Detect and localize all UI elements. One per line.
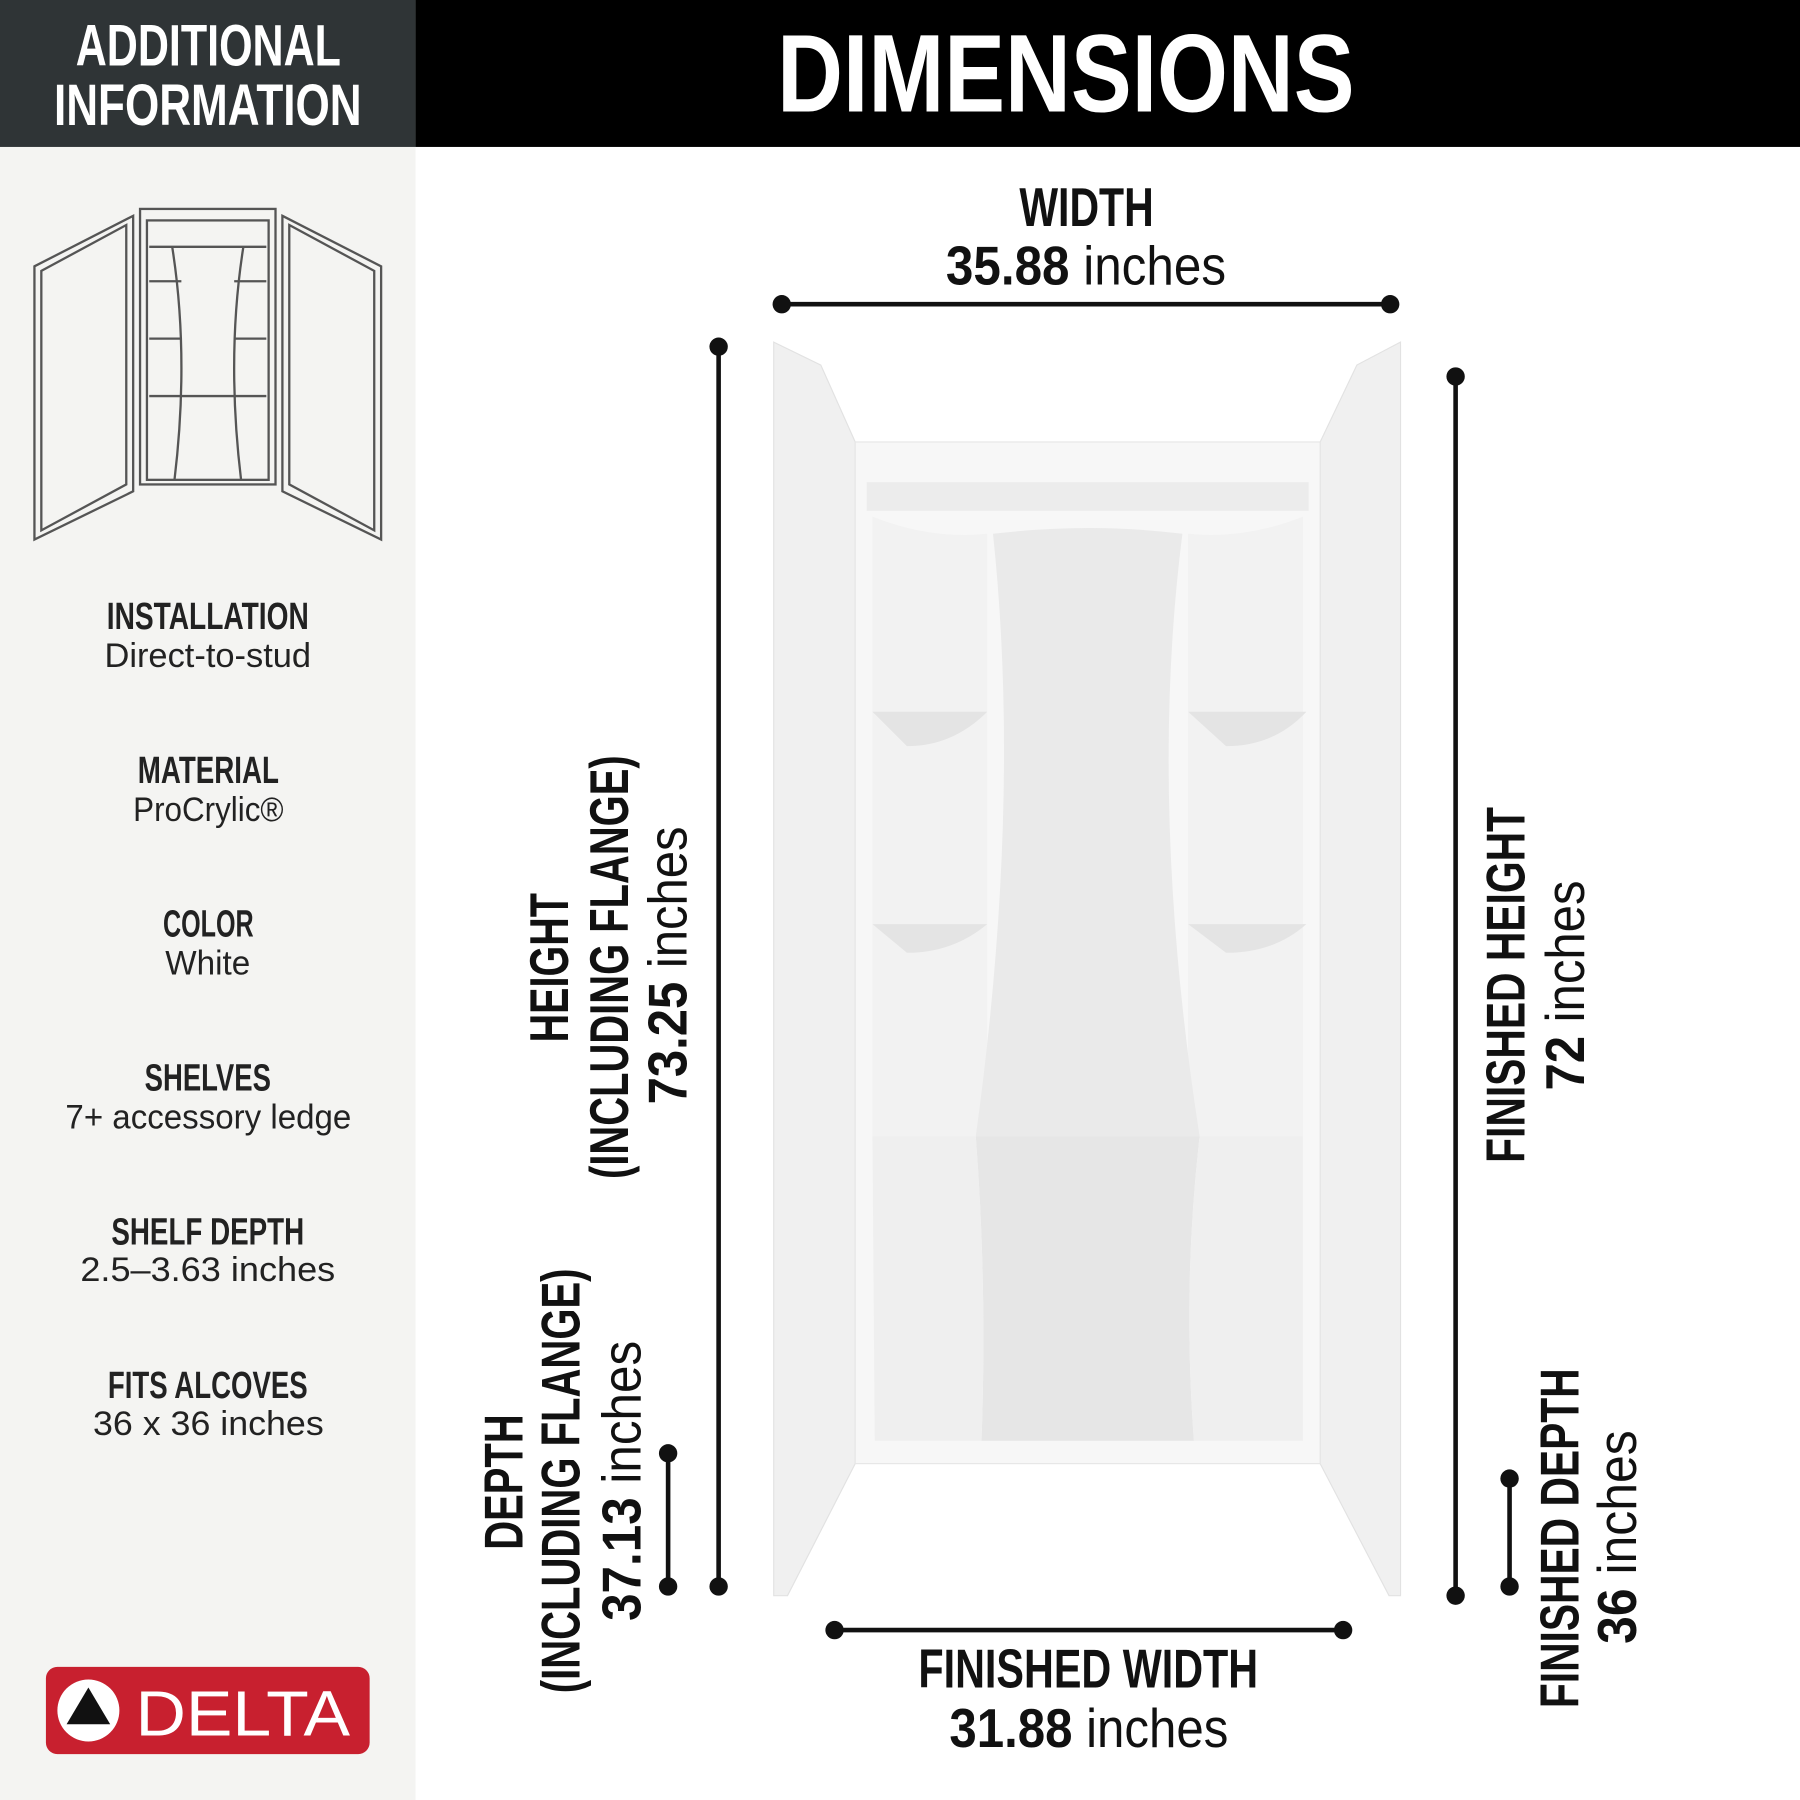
sidebar header: ADDITIONAL (76, 13, 341, 78)
logo: delta: DELTA (135, 1678, 350, 1750)
dimension: height: (INCLUDING FLANGE) (578, 755, 640, 1179)
text: installation (104, 596, 311, 675)
dimension: depth (472, 1268, 677, 1693)
text: fits alcoves: FITS ALCOVES (108, 1365, 308, 1407)
dimension: width: 35.88 inches (946, 235, 1226, 297)
dimension: finished depth (1500, 1368, 1648, 1708)
dimension: height (518, 338, 728, 1596)
dimension: finished width: FINISHED WIDTH (918, 1638, 1258, 1700)
text: fits alcoves: 36 x 36 inches (93, 1405, 324, 1443)
text: shelf depth: SHELF DEPTH (111, 1211, 304, 1253)
dimension: finished height: 72 inches (1534, 880, 1596, 1091)
text: material: ProCrylic® (133, 791, 284, 829)
dimension: depth: 37.13 inches (591, 1341, 653, 1621)
dimension: width: WIDTH (1019, 176, 1154, 238)
dimension: finished height: FINISHED HEIGHT (1474, 807, 1536, 1163)
text: shelves: SHELVES (145, 1058, 271, 1100)
logo: delta (46, 1667, 370, 1754)
header: dimensions: DIMENSIONS (777, 12, 1355, 135)
icon: shower outline (34, 209, 381, 540)
text: material: MATERIAL (138, 750, 279, 792)
dimension: finished depth: 36 inches (1586, 1430, 1648, 1644)
text: material (133, 750, 284, 829)
dimension: finished width (825, 1621, 1352, 1759)
dimension: finished depth: FINISHED DEPTH (1528, 1368, 1590, 1708)
text: shelves (65, 1058, 351, 1136)
dimension: height: 73.25 inches (636, 827, 698, 1104)
sidebar header: INFORMATION (54, 73, 362, 138)
text: color: COLOR (163, 904, 254, 946)
sidebar header (0, 0, 416, 147)
text: fits alcoves (93, 1365, 324, 1443)
dimension: finished height (1446, 367, 1596, 1605)
text: color: White (165, 945, 250, 983)
image: shower surround (771, 339, 1403, 1596)
text: color (163, 904, 254, 983)
text: installation: INSTALLATION (107, 596, 309, 638)
dimension: depth: (INCLUDING FLANGE) (530, 1268, 592, 1693)
header: dimensions (416, 0, 1800, 147)
text: shelf depth: 2.5–3.63 inches (80, 1251, 335, 1289)
text: shelf depth (80, 1211, 335, 1289)
panel: sidebar (0, 0, 416, 1800)
dimension: finished width: 31.88 inches (949, 1697, 1228, 1759)
dimension: width (773, 176, 1399, 313)
text: shelves: 7+ accessory ledge (65, 1098, 351, 1136)
dimension: height: HEIGHT (518, 893, 580, 1042)
dimension: depth: DEPTH (472, 1414, 534, 1550)
text: installation: Direct-to-stud (104, 637, 311, 675)
